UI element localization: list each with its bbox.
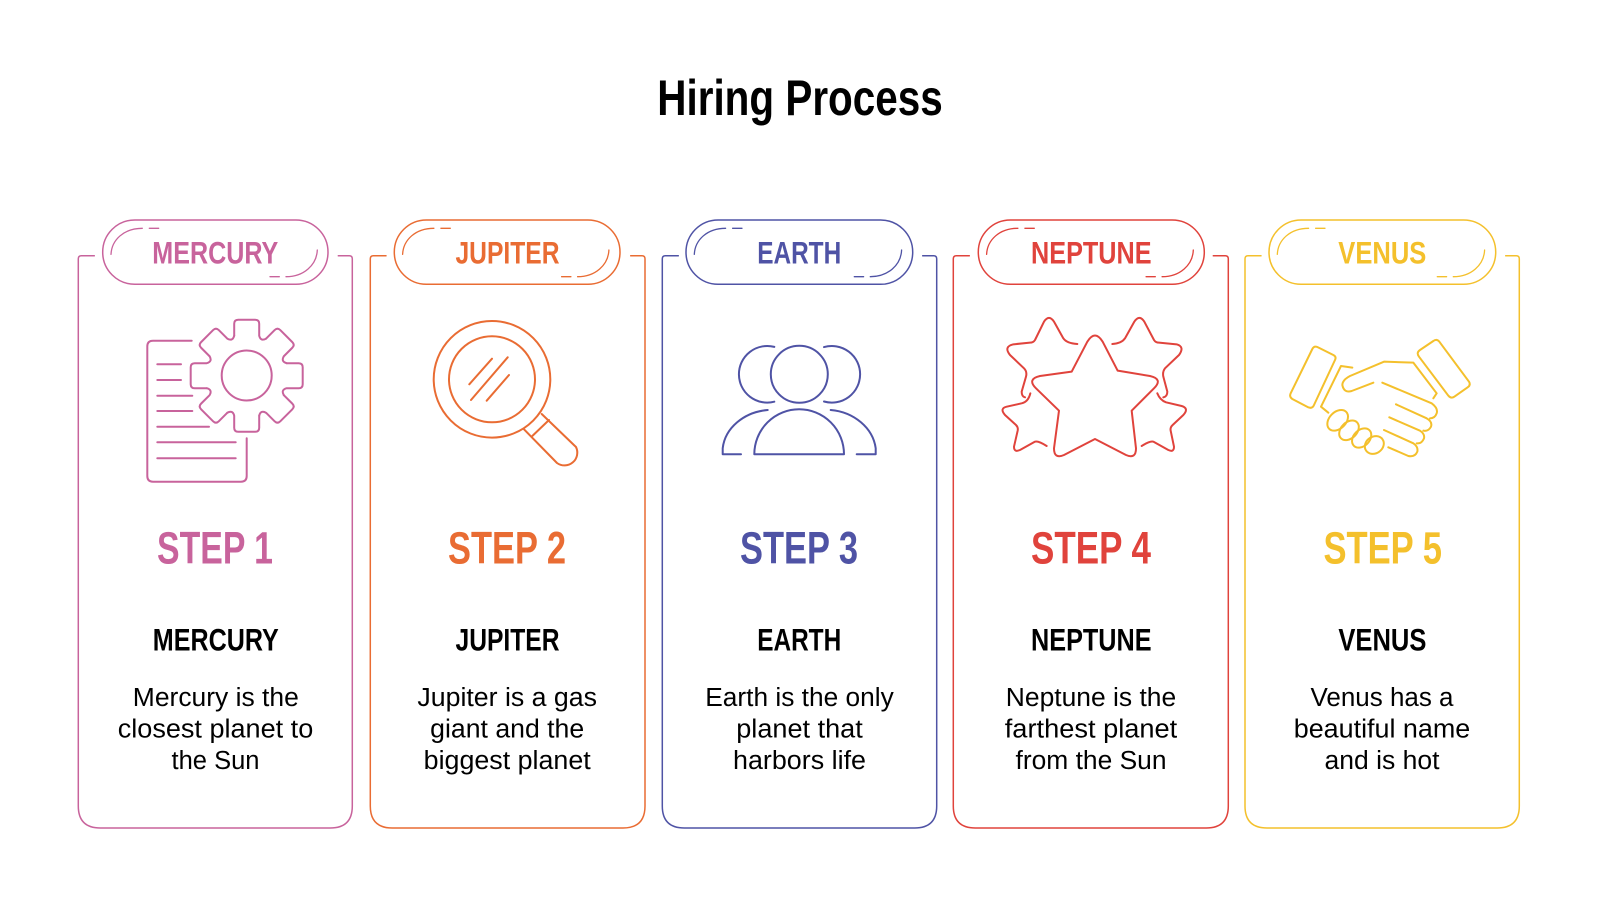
pill label: neptune xyxy=(978,220,1204,284)
step heading: STEP 3 xyxy=(740,522,858,573)
pill label: neptune: NEPTUNE xyxy=(1031,234,1152,270)
description: the Sun xyxy=(172,747,260,775)
panel: step 3 earth xyxy=(662,220,937,828)
pill label: venus xyxy=(1269,220,1496,284)
description xyxy=(705,684,894,775)
description: Jupiter is a gas xyxy=(417,684,597,712)
description: from the Sun xyxy=(1016,747,1166,775)
planet name: NEPTUNE xyxy=(1031,622,1152,658)
description: Earth is the only xyxy=(705,684,894,712)
description: Neptune is the xyxy=(1006,684,1176,712)
step heading: STEP 2 xyxy=(448,522,566,573)
step heading: STEP 4 xyxy=(1031,522,1151,573)
card outline xyxy=(953,256,1228,828)
title: Hiring Process xyxy=(657,69,943,126)
description: giant and the xyxy=(430,716,584,744)
description xyxy=(118,684,313,775)
description: Mercury is the xyxy=(133,684,299,712)
icon: five stars xyxy=(1003,318,1186,456)
planet name: VENUS xyxy=(1338,622,1426,658)
icon: magnifying glass xyxy=(434,321,577,465)
description: farthest planet xyxy=(1005,716,1177,744)
planet name: EARTH xyxy=(757,622,841,658)
description: closest planet to xyxy=(118,716,313,744)
panel: step 1 mercury xyxy=(78,220,352,828)
pill label: mercury: MERCURY xyxy=(152,234,278,270)
description xyxy=(1294,684,1470,775)
description: harbors life xyxy=(733,747,866,775)
pill label: venus: VENUS xyxy=(1338,234,1426,270)
planet name: MERCURY xyxy=(153,622,279,658)
description xyxy=(417,684,597,775)
step heading: STEP 1 xyxy=(157,522,273,573)
description: Venus has a xyxy=(1310,684,1454,712)
description: biggest planet xyxy=(424,747,591,775)
panel: step 5 venus xyxy=(1245,220,1519,828)
card outline xyxy=(78,256,352,828)
icon: group of people xyxy=(723,346,876,454)
pill label: mercury xyxy=(103,220,328,284)
icon: handshake xyxy=(1290,340,1470,458)
card outline xyxy=(1245,256,1519,828)
pill label: earth: EARTH xyxy=(757,234,841,270)
planet name: JUPITER xyxy=(456,622,560,658)
pill label: jupiter xyxy=(394,220,620,284)
description: planet that xyxy=(736,716,863,744)
card outline xyxy=(370,256,645,828)
pill label: earth xyxy=(686,220,913,284)
panel: step 2 jupiter xyxy=(370,220,645,828)
icon: document and gear xyxy=(147,320,303,482)
step heading: STEP 5 xyxy=(1323,522,1442,573)
description: and is hot xyxy=(1324,747,1440,775)
pill label: jupiter: JUPITER xyxy=(455,234,560,270)
card outline xyxy=(662,256,937,828)
description: beautiful name xyxy=(1294,716,1470,744)
description xyxy=(1005,684,1177,775)
panel: step 4 neptune xyxy=(953,220,1228,828)
